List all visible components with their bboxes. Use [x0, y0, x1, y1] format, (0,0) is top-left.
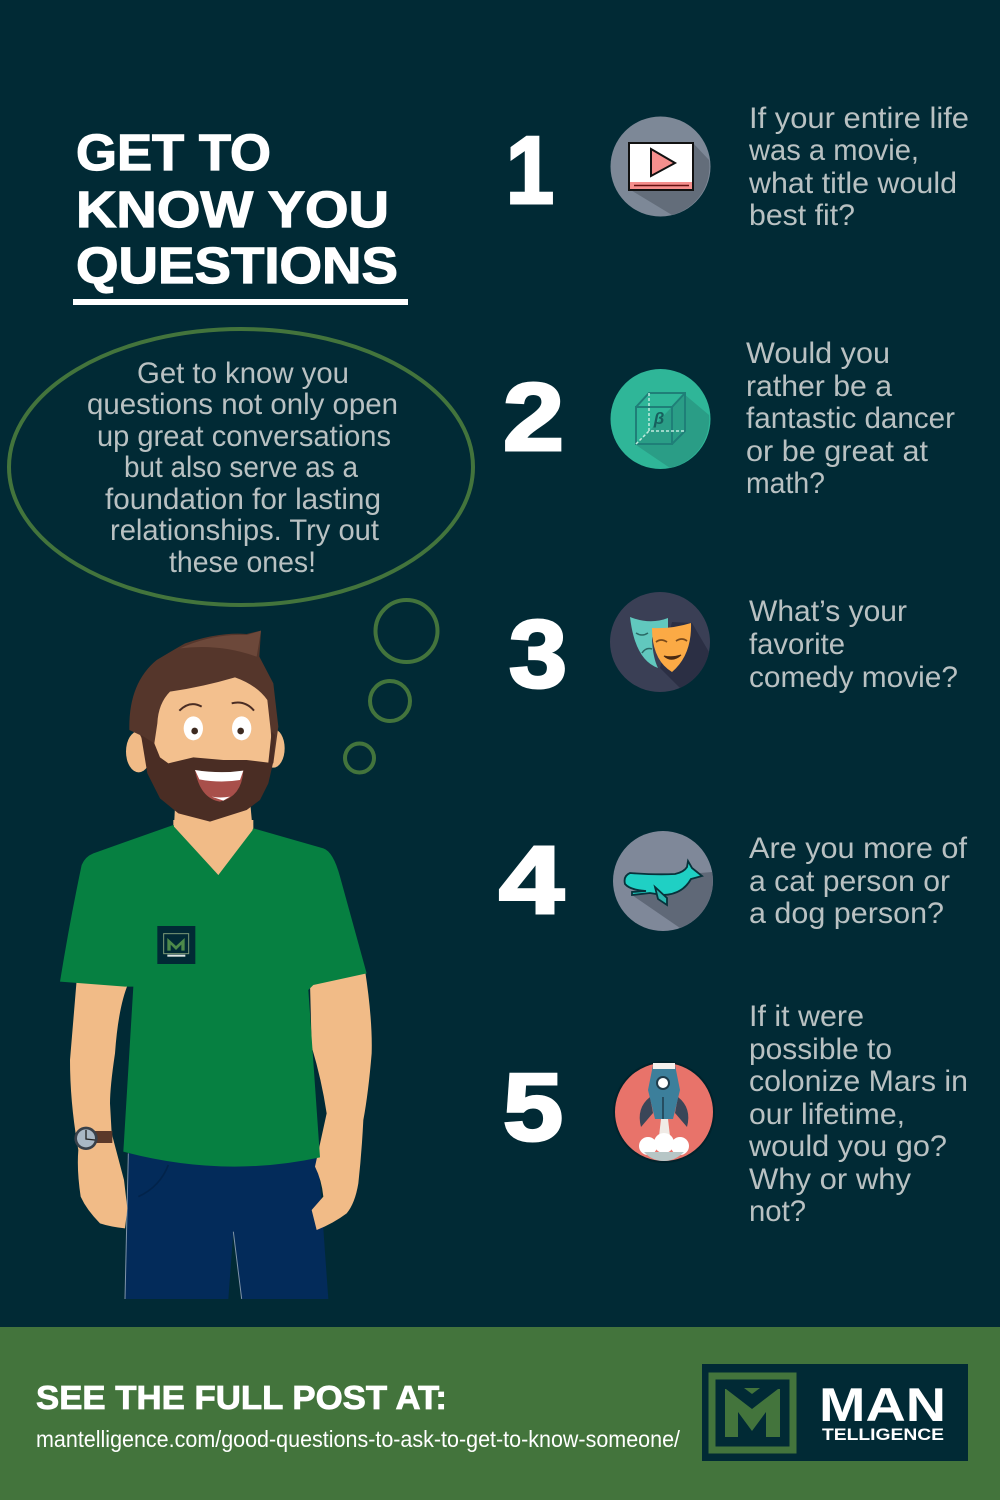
question 2: math?: [746, 467, 825, 500]
icon: beta cube: β: [653, 409, 664, 428]
question 3: comedy movie?: [749, 661, 958, 694]
question 3: favorite: [749, 628, 845, 661]
icon: whale: [613, 831, 713, 931]
question 5: would you go?: [748, 1130, 947, 1163]
question 4: a cat person or: [749, 865, 950, 898]
question 2: rather be a: [746, 370, 892, 403]
title: KNOW YOU: [76, 181, 389, 238]
question 2: [503, 337, 955, 500]
question 4: 4: [499, 827, 564, 934]
character: man in green shirt: [60, 631, 372, 1299]
footer band: [0, 1327, 1000, 1500]
speech bubble: [9, 329, 473, 605]
icon: theatre masks: [610, 592, 710, 692]
icon: video player: [610, 116, 710, 216]
question 1: what title would: [748, 167, 957, 200]
speech bubble: but also serve as a: [124, 451, 358, 484]
question 2: or be great at: [746, 435, 929, 468]
question 3: [509, 592, 958, 708]
logo: MAN: [819, 1378, 946, 1431]
footer url: mantelligence.com/good-questions-to-ask-to-get-to-know-someone/: [36, 1426, 681, 1452]
question 5: If it were: [749, 1000, 864, 1033]
question 5: Why or why: [749, 1163, 911, 1196]
icon: beta cube: [610, 369, 710, 469]
logo: TELLIGENCE: [822, 1425, 944, 1444]
question 5: possible to: [749, 1033, 892, 1066]
question 5: 5: [503, 1054, 563, 1161]
question 4: Are you more of: [749, 832, 968, 865]
speech bubble: foundation for lasting: [105, 483, 381, 516]
question 3: 3: [509, 601, 567, 708]
thought bubbles: [345, 600, 438, 772]
question 1: 1: [506, 117, 554, 224]
question 2: fantastic dancer: [746, 402, 955, 435]
speech bubble: questions not only open: [87, 388, 398, 421]
head: [126, 631, 285, 875]
footer heading: SEE THE FULL POST AT:: [36, 1379, 447, 1416]
logo: [702, 1364, 968, 1461]
question 1: was a movie,: [748, 134, 919, 167]
question 1: best fit?: [749, 199, 855, 232]
question 5: [503, 1000, 968, 1228]
question 1: If your entire life: [749, 102, 969, 135]
question 5: colonize Mars in: [749, 1065, 968, 1098]
title: GET TO: [76, 124, 271, 181]
icon: rocket: [614, 1062, 714, 1162]
speech bubble: up great conversations: [97, 420, 391, 453]
speech bubble: relationships. Try out: [110, 514, 380, 547]
speech bubble: Get to know you: [137, 357, 349, 390]
question 1: [506, 102, 969, 232]
question 5: our lifetime,: [749, 1098, 905, 1131]
question 3: What’s your: [749, 595, 907, 628]
question 2: Would you: [746, 337, 890, 370]
speech bubble: these ones!: [169, 546, 316, 579]
question 2: 2: [503, 364, 564, 471]
question 5: not?: [749, 1195, 806, 1228]
body: [60, 820, 372, 1299]
title: QUESTIONS: [76, 237, 398, 294]
question 4: a dog person?: [749, 897, 944, 930]
question 4: [499, 827, 968, 934]
title: [73, 124, 408, 305]
